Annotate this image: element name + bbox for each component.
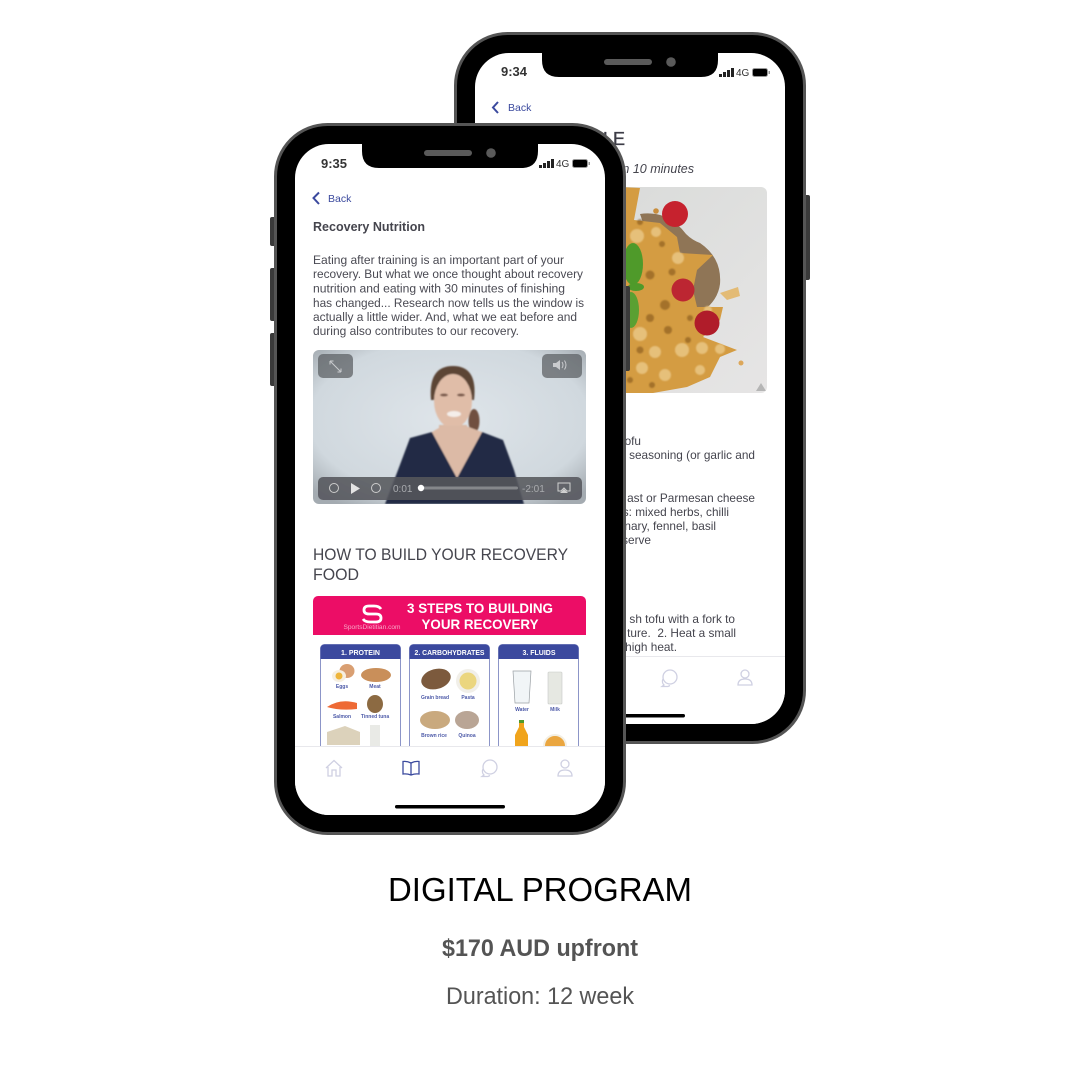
volume button [542,354,582,378]
method text: high heat. [625,640,677,654]
icon: chat [662,670,677,686]
card: protein [320,644,401,746]
presenter [385,366,524,504]
back phone body [456,34,804,742]
back phone status bar [501,64,770,79]
card: protein: Eggs [336,684,348,690]
card: protein: Tinned tuna [361,714,389,720]
playback controls [318,477,582,500]
article paragraph: nutrition and eating with 30 minutes of finishing [313,282,565,296]
front phone side buttons [270,217,630,386]
method text: ture. 2. Heat a small [627,626,736,640]
back link [493,102,532,114]
card: fluids: 3. FLUIDS [522,650,556,657]
ingredients list: ofu [625,434,641,448]
front phone screen [295,144,605,815]
front phone status bar: 9:35 [321,156,347,171]
article paragraph: Eating after training is an important part of your [313,253,564,267]
back phone status bar: 4G [736,68,750,79]
card: protein: Meat [369,684,381,690]
article paragraph: actually a little wider. And, what we eat before and [313,310,577,324]
method text: sh tofu with a fork to [629,612,735,626]
section heading [314,548,568,580]
card: carbohydrates [409,644,490,746]
card: protein: Salmon [333,714,351,720]
article paragraph: during also contributes to our recovery. [313,324,519,338]
logo [363,606,381,622]
section heading: FOOD [313,566,359,584]
video player [313,350,586,504]
ingredients list [622,434,755,547]
article title: Recovery Nutrition [313,220,425,234]
pink banner [313,596,586,635]
front phone status bar [321,156,590,171]
title: DIGITAL PROGRAM [388,871,692,908]
ingredients list: s: mixed herbs, chilli [623,505,729,519]
ingredients list: nary, fennel, basil [624,519,716,533]
card: carbohydrates: Pasta [461,695,475,701]
playback controls: 0:01 [393,484,413,495]
home indicator [395,805,505,808]
back phone screen [475,53,785,724]
back phone tab bar [626,656,785,724]
ingredients list: ast or Parmesan cheese [627,491,755,505]
front phone: recovery nutrition screen [270,124,630,834]
back phone side button [803,195,810,280]
method text [625,612,736,654]
icon: book [403,761,419,775]
duration: Duration: 12 week [446,983,635,1010]
front phone status bar: 4G [556,159,570,170]
card: protein: 1. PROTEIN [341,650,380,657]
card: fluids: Milk [550,707,560,713]
article paragraph: recovery. But what we once thought about recovery [313,267,584,281]
icon: person [738,670,752,685]
card: carbohydrates: 2. CARBOHYDRATES [414,650,485,657]
pink banner: SportsDietitian.com [344,624,401,631]
back phone notch [542,53,718,77]
front phone notch [362,144,538,168]
playback controls: -2:01 [522,484,545,495]
back link [314,192,352,205]
card: fluids: Water [515,707,529,713]
card: carbohydrates: Quinoa [458,733,476,739]
food photo: tofu scramble [626,187,767,393]
front phone tab bar [295,746,605,815]
back link: Back [328,193,352,205]
front phone body [276,124,624,834]
front phone content [313,192,586,764]
section heading: HOW TO BUILD YOUR RECOVERY [313,546,568,564]
card: carbohydrates: Brown rice [421,733,447,739]
pink banner: YOUR RECOVERY [422,616,539,632]
expand button [318,354,353,378]
article paragraph: has changed... Research now tells us the window is [313,296,584,310]
back phone status bar: 9:34 [501,64,528,79]
card: carbohydrates: Grain bread [421,695,449,701]
recipe time: n 10 minutes [622,162,694,176]
pink banner: 3 STEPS TO BUILDING [407,600,553,616]
back link: Back [508,102,532,114]
card: fluids [498,644,579,746]
back phone: recipe screen [456,34,810,742]
ingredients list: seasoning (or garlic and [629,448,755,462]
icon: person [558,760,572,776]
home indicator [626,714,685,718]
icon: home [326,760,342,776]
price: $170 AUD upfront [442,935,638,962]
article paragraph [313,253,584,338]
ingredients list: serve [622,533,651,547]
icon: chat [482,760,497,776]
recipe heading: LE [603,129,625,149]
back phone content [493,102,767,654]
